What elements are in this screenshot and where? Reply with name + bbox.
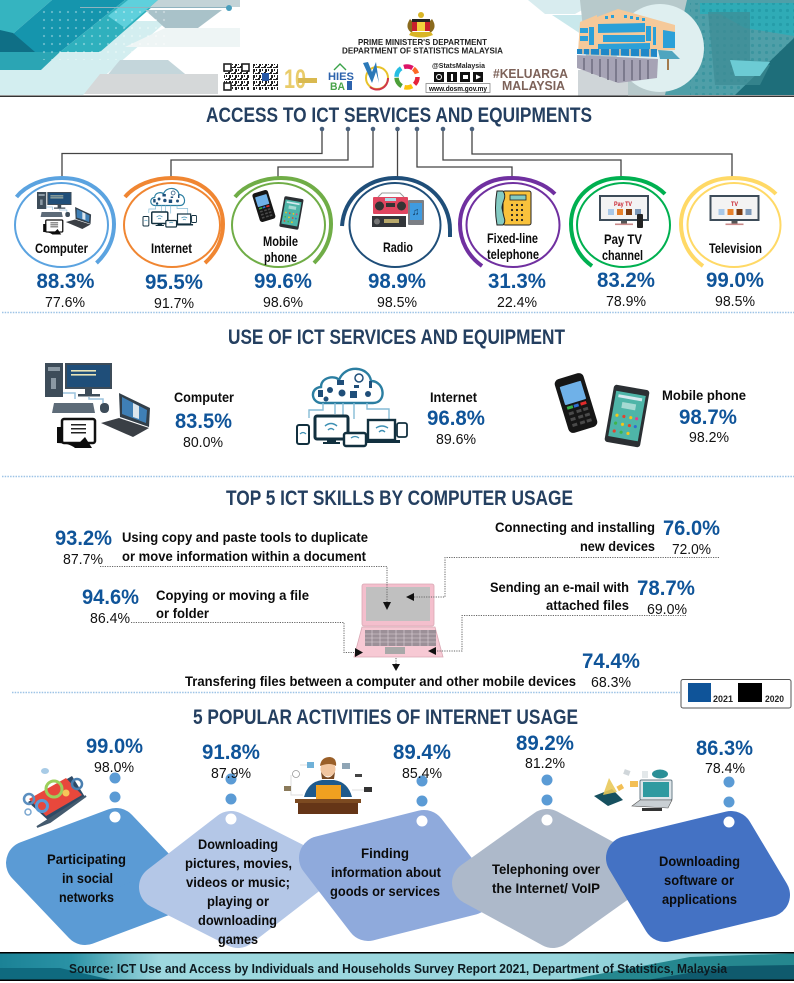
panel: top 5 ICT skills <box>55 487 791 708</box>
activity 4 values and label <box>492 732 601 896</box>
item: television: Television <box>709 240 762 256</box>
item: computer use: 80.0% <box>183 435 223 451</box>
icon: QR codes <box>224 64 278 90</box>
skill: sending e-mail: attached files <box>546 597 629 613</box>
activity 4 values and label: 81.2% <box>525 756 565 772</box>
item: fixed-line telephone <box>460 178 560 311</box>
item: radio: 98.5% <box>377 295 417 311</box>
icon: vision logo <box>363 62 388 90</box>
header banner <box>0 0 794 97</box>
icon: HIES logo: HIES <box>328 71 354 83</box>
activity 5 values and label <box>659 737 753 907</box>
skill: copy and paste: 93.2% <box>55 527 112 550</box>
item: internet <box>124 178 223 312</box>
skill: copying a file: or folder <box>156 605 210 621</box>
activity 2 values and label: 87.9% <box>211 766 251 782</box>
campaign wordmark: MALAYSIA <box>502 78 566 93</box>
skill connectors and arrows <box>100 558 719 671</box>
panel: access to ICT services and equipment <box>15 104 780 312</box>
icon: man at desk <box>284 757 372 814</box>
activity 3 values and label: Finding <box>361 845 409 861</box>
item: fixed-line telephone: telephone <box>487 246 539 262</box>
activity 1 values and label: networks <box>59 889 114 905</box>
activity 1 values and label <box>47 735 143 905</box>
diamond: telephoning <box>474 831 626 926</box>
item: computer use <box>45 363 234 451</box>
skill: copying a file: 94.6% <box>82 586 139 609</box>
social media block: @StatsMalaysia <box>432 61 486 70</box>
item: pay TV channel <box>571 178 670 310</box>
activity 2 values and label: 91.8% <box>202 741 260 764</box>
heading: access: ACCESS TO ICT SERVICES AND EQUIPMENTS <box>206 104 592 127</box>
skill: connecting devices: 76.0% <box>663 517 720 540</box>
campaign wordmark: #KELUARGA <box>493 66 569 81</box>
activity 4 values and label: the Internet/ VoIP <box>492 880 600 896</box>
item: radio: 98.9% <box>368 270 426 293</box>
activity 2 values and label: downloading <box>198 912 277 928</box>
skill: connecting devices: 72.0% <box>672 542 711 558</box>
skill: copy and paste: Using copy and paste tools to duplicate <box>122 529 368 545</box>
skill: transferring files: Transfering files between a computer and other mobile devices <box>185 673 576 689</box>
footer source bar <box>0 952 794 981</box>
item: computer use: 83.5% <box>175 410 232 433</box>
item: internet use: 89.6% <box>436 432 476 448</box>
item: internet use <box>297 369 485 448</box>
item: mobile phone use: Mobile phone <box>662 387 746 403</box>
social media block <box>426 61 490 93</box>
item: television <box>681 178 780 310</box>
item: computer <box>15 178 114 311</box>
activity 3 values and label: information about <box>331 864 441 880</box>
item: internet use: 96.8% <box>427 407 485 430</box>
panel: 5 popular activities of internet usage <box>24 706 768 947</box>
legend: 2020 <box>765 694 784 704</box>
item: radio <box>342 178 450 311</box>
item: pay TV channel: Pay TV <box>604 231 643 247</box>
department names: DEPARTMENT OF STATISTICS MALAYSIA <box>342 46 503 56</box>
panel: use of ICT services and equipment <box>45 326 746 451</box>
skill: copying a file: 86.4% <box>90 611 130 627</box>
connector lines <box>62 127 732 178</box>
item: pay TV channel: channel <box>602 247 643 263</box>
icon: SDG wheel <box>396 66 418 88</box>
activity 2 values and label: playing or <box>207 893 270 909</box>
left geometric decoration <box>0 0 600 95</box>
icon: pink laptop <box>354 584 443 657</box>
item: internet: 91.7% <box>154 296 194 312</box>
activity 1 values and label: 99.0% <box>86 735 143 758</box>
activity 4 values and label: 89.2% <box>516 732 574 755</box>
activity 3 values and label: 85.4% <box>402 766 442 782</box>
item: mobile phone use: 98.2% <box>689 430 729 446</box>
activity 2 values and label <box>185 741 292 947</box>
icon: HIES logo: BA <box>330 81 345 93</box>
item: pay TV channel: 83.2% <box>597 269 655 292</box>
legend: 2021 <box>713 694 733 704</box>
diamond: social networks <box>28 830 173 923</box>
item: mobile phone: 98.6% <box>263 295 303 311</box>
heading: skills: TOP 5 ICT SKILLS BY COMPUTER USAGE <box>226 487 573 510</box>
diamond: finding information <box>321 832 471 919</box>
activity 1 values and label: Participating <box>47 851 126 867</box>
skill: connecting devices: new devices <box>580 538 655 554</box>
skill: connecting devices: Connecting and installing <box>495 519 655 535</box>
item: mobile phone <box>232 178 331 311</box>
activity 2 values and label: pictures, movies, <box>185 855 292 871</box>
item: radio: ♫ <box>412 207 420 218</box>
item: computer use: Computer <box>174 389 234 405</box>
skill: transferring files: 74.4% <box>582 650 640 673</box>
heading: activities: 5 POPULAR ACTIVITIES OF INTERNET USAGE <box>193 706 578 729</box>
item: mobile phone: 99.6% <box>254 270 312 293</box>
item: fixed-line telephone: Fixed-line <box>487 230 538 246</box>
item: internet use: Internet <box>430 389 477 405</box>
icon: laptop with gears <box>24 768 86 827</box>
skill: copy and paste <box>55 527 368 568</box>
activity 1 values and label: 98.0% <box>94 760 134 776</box>
skill: connecting devices <box>495 517 720 558</box>
skill: transferring files <box>185 650 640 691</box>
item: mobile phone use <box>553 372 746 448</box>
skill: sending e-mail: 78.7% <box>637 577 695 600</box>
item: mobile phone: phone <box>264 249 297 265</box>
skill: transferring files: 68.3% <box>591 675 631 691</box>
activity 5 values and label: applications <box>662 891 737 907</box>
skill: copy and paste: 87.7% <box>63 552 103 568</box>
item: pay TV channel: 78.9% <box>606 294 646 310</box>
activity 5 values and label: software or <box>664 872 735 888</box>
heading: use: USE OF ICT SERVICES AND EQUIPMENT <box>228 326 565 349</box>
item: mobile phone use: 98.7% <box>679 406 737 429</box>
skill: sending e-mail: Sending an e-mail with <box>490 579 629 595</box>
department names <box>342 37 503 56</box>
icon: coat of arms <box>407 12 435 38</box>
item: radio: Radio <box>383 239 413 255</box>
item: mobile phone: Mobile <box>263 233 298 249</box>
item: computer: Computer <box>35 240 88 256</box>
footer source bar: Source: ICT Use and Access by Individuals and Households Survey Report 2021, Department of Statistics, Malaysia <box>69 961 728 976</box>
item: fixed-line telephone: 31.3% <box>488 270 546 293</box>
skill: sending e-mail: 69.0% <box>647 602 687 618</box>
item: pay TV channel: Pay TV <box>614 202 632 208</box>
item: television: 99.0% <box>706 269 764 292</box>
skill: copying a file: Copying or moving a file <box>156 587 309 603</box>
skill: copy and paste: or move information within a document <box>122 548 366 564</box>
item: computer: 77.6% <box>45 295 85 311</box>
right building decoration <box>577 0 794 96</box>
campaign wordmark <box>493 66 569 93</box>
activity 5 values and label: 86.3% <box>696 737 753 760</box>
bubbles <box>110 772 734 828</box>
item: internet: Internet <box>151 240 192 256</box>
item: computer: 88.3% <box>36 270 95 293</box>
activity 3 values and label: goods or services <box>330 883 440 899</box>
department names: PRIME MINISTER'S DEPARTMENT <box>358 37 488 47</box>
activity 5 values and label: 78.4% <box>705 761 745 777</box>
activity 2 values and label: Downloading <box>198 836 278 852</box>
diamond: downloading media <box>161 833 308 926</box>
item: internet: 95.5% <box>145 271 203 294</box>
activity 1 values and label: in social <box>62 870 113 886</box>
activity 2 values and label: videos or music; <box>186 874 290 890</box>
item: fixed-line telephone: 22.4% <box>497 295 537 311</box>
icon: 10 year logo: 10 <box>284 64 306 94</box>
item: television: TV <box>731 202 738 208</box>
activity 3 values and label <box>330 741 451 899</box>
diamond: downloading software <box>628 833 768 920</box>
skill: copying a file <box>82 586 309 627</box>
activity 4 values and label: Telephoning over <box>492 861 601 877</box>
white logo strip <box>219 60 576 95</box>
icon: software download <box>594 769 672 811</box>
skill: sending e-mail <box>490 577 695 618</box>
activity 5 values and label: Downloading <box>659 853 740 869</box>
icon: HIES logo <box>328 64 354 93</box>
activity 2 values and label: games <box>218 931 258 947</box>
item: television: 98.5% <box>715 294 755 310</box>
social media block: www.dosm.gov.my <box>428 84 488 93</box>
legend <box>681 680 791 708</box>
activity 3 values and label: 89.4% <box>393 741 451 764</box>
